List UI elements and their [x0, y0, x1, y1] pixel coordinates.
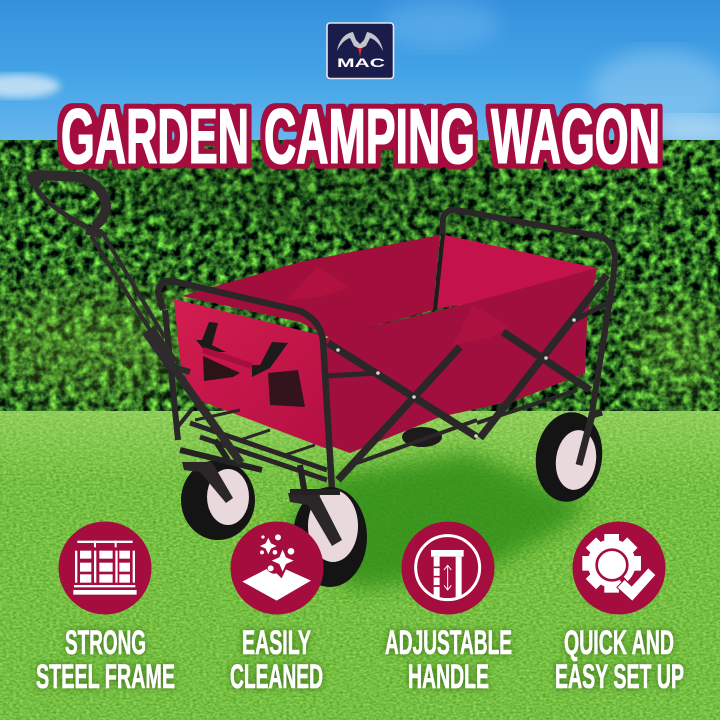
feature: adjustable handle	[385, 522, 512, 696]
near-end pockets	[196, 322, 305, 408]
label: STRONG	[65, 624, 146, 662]
fabric: interior left wall	[182, 235, 440, 338]
interior flap	[287, 267, 350, 300]
fabric: long side panel	[322, 268, 597, 453]
title: GARDEN	[61, 92, 249, 180]
background: lawn	[0, 411, 720, 720]
label: STEEL FRAME	[36, 658, 175, 696]
badge circle	[572, 522, 666, 614]
brand logo: MAC: MAC	[337, 58, 385, 70]
badge circle	[230, 522, 324, 614]
fabric: interior right wall	[435, 235, 597, 309]
label: CLEANED	[230, 658, 323, 696]
background: green hedge	[0, 140, 720, 412]
icon: adjustable handle	[416, 536, 480, 600]
feature: quick and easy set up	[555, 522, 684, 696]
underside rails	[175, 408, 327, 480]
front middle wheel	[288, 487, 367, 587]
product: folding wagon	[33, 175, 615, 587]
frame left leg	[165, 310, 178, 440]
side cross bars	[327, 275, 615, 480]
label: ADJUSTABLE	[385, 624, 512, 662]
near frame	[158, 281, 332, 490]
label	[555, 624, 684, 696]
right fork	[579, 412, 602, 465]
far frame	[442, 210, 615, 412]
label	[230, 624, 323, 696]
label	[36, 624, 175, 696]
front left wheel	[181, 460, 255, 540]
interior strap	[435, 234, 443, 310]
feature: easily cleaned	[230, 522, 324, 696]
wagon shadow on grass	[280, 452, 590, 590]
brand logo: MAC	[327, 23, 394, 78]
side flap	[453, 305, 510, 345]
title	[61, 92, 660, 180]
icon: gear, magnifier and check	[582, 534, 655, 601]
icon: steel frame	[73, 541, 137, 595]
icon: sparkling clean cloth	[242, 534, 311, 601]
badge circle	[402, 522, 494, 614]
frame bolts	[336, 318, 576, 438]
label: HANDLE	[408, 658, 489, 696]
front axle bracket	[180, 440, 340, 495]
label: EASILY	[242, 624, 311, 662]
feature: strong steel frame	[36, 522, 175, 696]
badge circle	[58, 522, 152, 614]
title: CAMPING	[264, 92, 475, 180]
background: blue sky with clouds	[0, 0, 720, 160]
fabric: near end panel	[174, 299, 330, 450]
hidden rear wheel	[402, 427, 442, 447]
far right wheel	[530, 408, 608, 506]
label	[385, 624, 512, 696]
telescopic handle	[33, 175, 241, 463]
